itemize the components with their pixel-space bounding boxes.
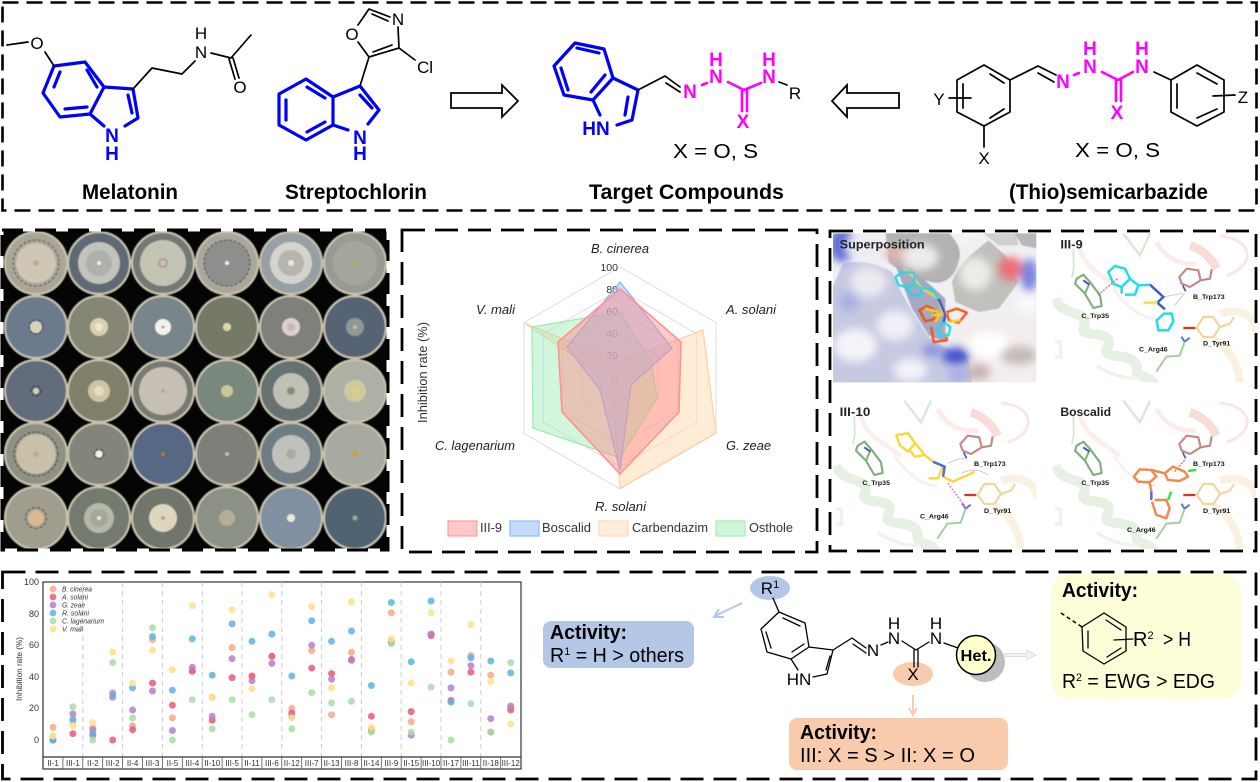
series: Osthole [532,312,657,458]
SAR scaffold molecule: N [888,629,900,648]
molecule: (Thio)semicarbazide: X [978,149,990,168]
x axis compound labels: II-15 [403,759,420,768]
callout: X activity: III: X = S > II: X = O [800,745,975,767]
callout: X activity: Activity: [800,722,877,744]
SAR scaffold molecule: Het. [960,648,992,665]
arrow: left [832,85,899,117]
molecule: Target compound: X = O, S [673,141,758,163]
radar legend [448,521,793,536]
molecule: Target compound: HN [582,119,610,140]
x axis compound labels: III-4 [185,759,200,768]
molecule: Target compound: N [683,82,697,103]
molecule: Target compound: H [762,50,776,71]
molecule: Melatonin: N [195,43,207,62]
docking view: III-9 [1053,233,1256,389]
molecule: Target compound: R [789,84,801,103]
y axis [15,577,39,745]
axis labels: V. mali [476,303,516,317]
arrow: right [451,85,518,117]
x axis compound labels: II-12 [284,759,300,768]
SAR scaffold molecule: H [930,614,942,633]
scatter legend: B. cinerea [62,586,92,594]
axis labels: A. solani [725,303,777,317]
docking view: Boscalid: D_Tyr91 [1203,508,1231,515]
SAR scaffold molecule: N [867,641,879,660]
radar tick labels: 20 [606,350,618,362]
docking view: Boscalid: Boscalid [1060,405,1111,419]
panel: scatter chart and SAR [2,572,1256,779]
SAR scaffold molecule: R [761,579,773,598]
radar tick labels: 0 [612,373,618,385]
molecule: Melatonin: O [30,34,44,53]
radar legend: Carbendazim [632,521,708,535]
radar grid [524,267,716,489]
molecule: Target compound: X [737,112,750,133]
panel: design strategy [2,2,1256,210]
SAR scaffold molecule: X [907,665,919,684]
x axis compound labels: III-1 [66,759,80,768]
scatter legend [50,586,104,634]
molecule: Target compound [554,43,801,204]
callout: R1 activity [543,621,694,668]
callout: Het activity: R [1133,629,1147,651]
callout: X activity [789,718,1008,770]
docking view: Boscalid: B_Trp173 [1193,461,1225,468]
molecule: (Thio)semicarbazide: N [1083,57,1097,78]
axis labels [435,242,777,514]
callout: Het activity: 2 [1147,630,1154,642]
y axis: 60 [29,640,39,650]
docking view: Boscalid: C_Arg46 [1127,527,1156,534]
radar tick labels: 40 [606,328,618,340]
docking view: III-10: B_Trp173 [974,461,1006,468]
x axis compound labels: III-10 [422,759,441,768]
docking view: III-9: C_Trp35 [1081,313,1109,320]
radar legend: Osthole [749,521,793,535]
y axis title: Inhibition rate (%) [416,322,430,423]
molecule: Streptochlorin: Cl [417,58,433,77]
docking view: III-9: B_Trp173 [1193,294,1225,301]
molecule: Melatonin: O [233,78,247,97]
callout: Het activity: = EWG > EDG [1082,671,1215,693]
x axis compound labels: II-2 [87,759,99,768]
docked ligands [895,269,967,342]
callout: Het activity: > H [1163,629,1191,651]
x axis compound labels: II-10 [204,759,221,768]
radar tick labels: 80 [606,284,618,296]
molecule: Streptochlorin: O [345,25,359,44]
scatter legend: A. solani [61,594,88,602]
docking view: Boscalid: C_Trp35 [1081,480,1109,487]
y axis: 0 [34,735,39,745]
y axis: 20 [29,703,39,713]
scatter legend: V. mali [62,626,83,634]
molecule: (Thio)semicarbazide: X = O, S [1075,140,1160,162]
x axis compound labels [47,759,520,768]
docking view: III-9: III-9 [1060,237,1083,251]
radar tick labels [600,262,618,385]
data points [50,591,514,744]
series: III-9 [558,289,681,474]
radar tick labels: 60 [606,306,618,318]
x axis compound labels: III-12 [502,759,520,768]
plot frame and column separators [43,582,521,769]
y axis: 80 [29,609,39,619]
series: Boscalid [567,282,672,470]
docking view: III-9: D_Tyr91 [1203,341,1231,348]
x axis compound labels: II-5 [167,759,179,768]
molecule: (Thio)semicarbazide: H [1083,39,1097,60]
arrow: to Het callout [1005,650,1036,660]
x axis compound labels: III-3 [146,759,160,768]
molecule: Melatonin: H [195,24,207,43]
panel: fungal plate photographs [2,230,388,550]
callout: R1 activity: Activity: [550,622,627,644]
radar tick labels: 100 [600,262,618,274]
docking view: III-10 [833,400,1037,556]
molecule: (Thio)semicarbazide: Y [933,90,945,109]
series: Carbendazim [524,323,716,488]
molecule: (Thio)semicarbazide: X [1111,103,1124,124]
x axis compound labels: III-5 [225,759,240,768]
radar legend: III-9 [480,521,502,535]
scatter legend: C. lagenarium [62,618,104,626]
axis labels: C. lagenarium [435,439,515,453]
label: Superposition: Superposition [840,237,925,251]
callout: Het activity: 2 [1076,672,1082,684]
x axis compound labels: II-11 [244,759,260,768]
SAR scaffold molecule [750,576,1005,689]
y axis: Inhibition rate (%) [15,637,24,701]
y axis: 40 [29,672,39,682]
axis labels: R. solani [595,500,647,514]
SAR scaffold molecule: H [888,614,900,633]
x axis compound labels: II-18 [483,759,499,768]
docking view: III-10: III-10 [840,405,871,419]
arrow: to R1 callout [714,603,742,617]
x axis compound labels: II-4 [127,759,139,768]
molecule: Streptochlorin: N [392,10,404,29]
molecule: (Thio)semicarbazide: N [1135,57,1149,78]
docking view: III-10: C_Arg46 [920,513,949,520]
SAR scaffold molecule: N [930,629,942,648]
name: Melatonin: Melatonin [82,181,178,204]
molecule: Target compound: N [709,67,723,88]
x axis compound labels: III-7 [305,759,319,768]
x axis compound labels: III-2 [106,759,120,768]
molecule: Streptochlorin [279,9,433,204]
docking view: Superposition [829,229,1038,384]
x axis compound labels: III-6 [265,759,279,768]
panel: molecular docking [829,229,1256,556]
panel: radar chart [402,230,817,552]
photo grid of culture dishes [5,232,386,549]
molecule: Target compound: N [762,67,776,88]
callout: Het activity [1051,574,1241,699]
callout: R1 activity: = H > others [570,645,684,667]
callout: R1 activity: 1 [564,646,570,658]
name: Streptochlorin: Streptochlorin [285,181,427,204]
molecule: Target compound: H [709,50,723,71]
molecule: (Thio)semicarbazide: H [1135,39,1149,60]
SAR scaffold molecule: HN [787,670,811,689]
molecule: (Thio)semicarbazide [933,39,1248,204]
SAR scaffold molecule: 1 [773,579,779,591]
docking view: III-10: C_Trp35 [862,480,890,487]
scatter plot [15,577,521,769]
panel border: top [2,2,1256,210]
callout: R1 activity: R [550,645,564,667]
molecule: Streptochlorin: N [353,128,367,149]
scatter legend: G. zeae [62,602,85,610]
x axis compound labels: II-1 [47,759,59,768]
arrow: to X callout [909,695,917,715]
scatter legend: R. solani [62,610,89,618]
molecule: (Thio)semicarbazide: N [1056,72,1070,93]
radar legend: Boscalid [542,521,591,535]
molecule: (Thio)semicarbazide: Z [1238,88,1248,107]
x axis compound labels: III-9 [384,759,399,768]
molecule: Melatonin [7,24,251,204]
docking view: III-9: C_Arg46 [1139,346,1168,353]
y axis: 100 [24,577,39,587]
name: (Thio)semicarbazide: (Thio)semicarbazide [1009,181,1208,204]
callout: Het activity: R [1062,671,1076,693]
axis labels: G. zeae [726,439,771,453]
name: Target Compounds: Target Compounds [589,181,784,204]
x axis compound labels: III-11 [462,759,480,768]
x axis compound labels: III-8 [345,759,359,768]
x axis compound labels: II-14 [363,759,380,768]
x axis compound labels: II-17 [443,759,460,768]
molecule: Melatonin: N [105,126,119,147]
docking view: Boscalid [1053,400,1256,556]
docking view: III-10: D_Tyr91 [984,508,1012,515]
callout: Het activity: Activity: [1062,580,1138,602]
axis labels: B. cinerea [591,242,649,256]
x axis compound labels: II-13 [324,759,340,768]
surface lobes [832,262,975,384]
molecule: Streptochlorin: H [353,144,367,165]
molecule: Melatonin: H [105,144,119,165]
